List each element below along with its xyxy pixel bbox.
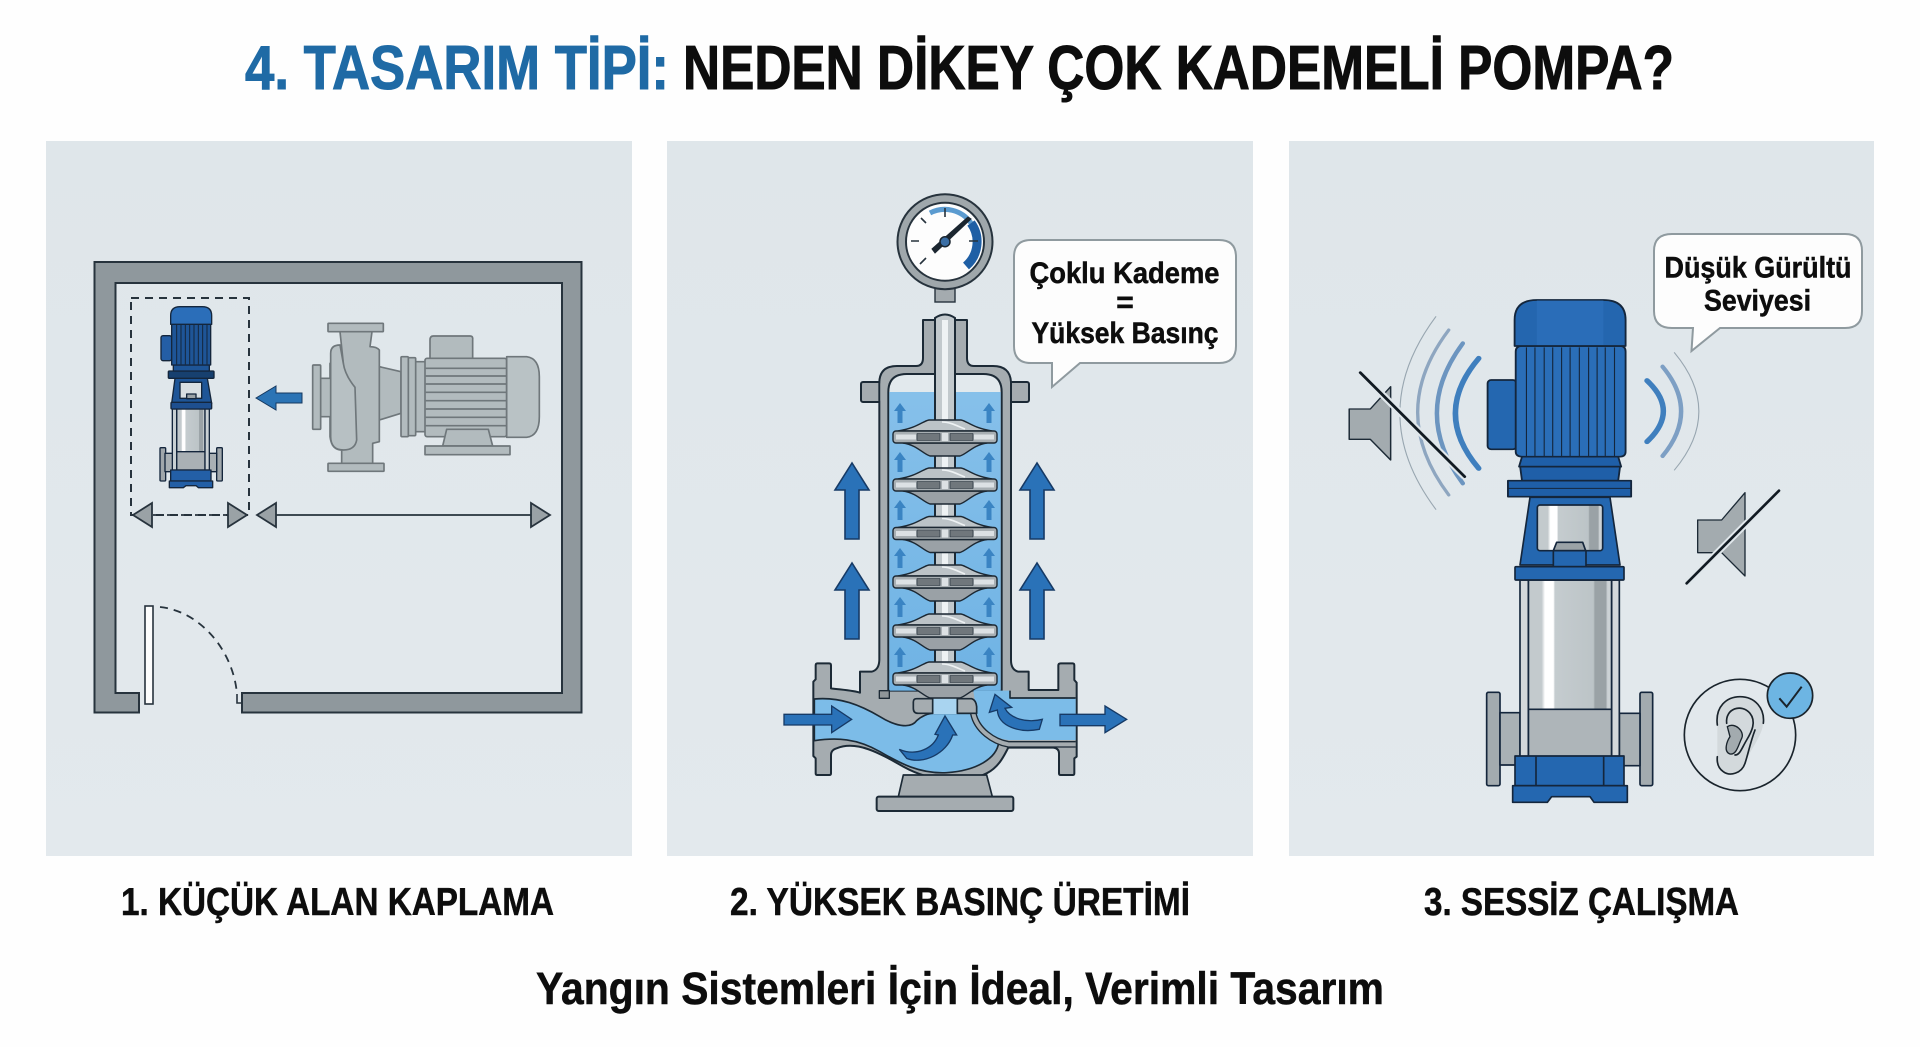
callout: multi stage equals high pressure: = [1116,286,1134,319]
icon: ear with check badge [1684,673,1813,791]
callout: multi stage equals high pressure [1014,240,1236,387]
sound waves, right [1647,353,1699,470]
dimension: horizontal pump width [257,503,550,527]
pump casing and water chambers [813,320,1077,811]
large upward pressure arrows [835,463,1054,639]
callout: low noise level [1654,234,1862,351]
room walls [94,262,582,712]
big horizontal pump, faded grey [313,323,539,471]
door [145,606,242,704]
dashed footprint box [131,298,249,515]
callout: multi stage equals high pressure: Çoklu Kademe [1030,257,1220,290]
motor [1488,300,1631,497]
pump body [1487,497,1653,802]
title: NEDEN DİKEY ÇOK KADEMELİ POMPA? [683,34,1674,103]
caption: panel 1: 1. KÜÇÜK ALAN KAPLAMA [121,881,554,924]
panel: quiet operation [1289,141,1874,856]
flow arrows through volute [784,694,1127,760]
title: 4. TASARIM TİPİ: [245,34,669,103]
internal small flow arrows [894,403,995,667]
impeller stack [893,420,997,698]
caption: panel 2: 2. YÜKSEK BASINÇ ÜRETİMİ [730,881,1190,924]
callout: low noise level: Düşük Gürültü [1664,252,1852,284]
panel: high pressure [667,141,1253,856]
drive shaft [935,314,955,692]
muted speaker, right [1687,491,1779,583]
dimension: vertical pump width [133,503,247,527]
title [245,34,1674,103]
callout: low noise level: Seviyesi [1704,284,1811,318]
callout: multi stage equals high pressure: Yüksek Basınç [1032,317,1218,350]
caption: panel 3: 3. SESSİZ ÇALIŞMA [1424,881,1739,924]
small vertical pump [160,307,222,488]
pressure gauge [898,194,992,302]
sound waves and muted speaker, left [1349,317,1479,509]
panel: small footprint [46,141,632,856]
arrow: blue, pointing to vertical pump [256,386,302,410]
tagline: Yangın Sistemleri İçin İdeal, Verimli Tasarım [536,963,1384,1014]
